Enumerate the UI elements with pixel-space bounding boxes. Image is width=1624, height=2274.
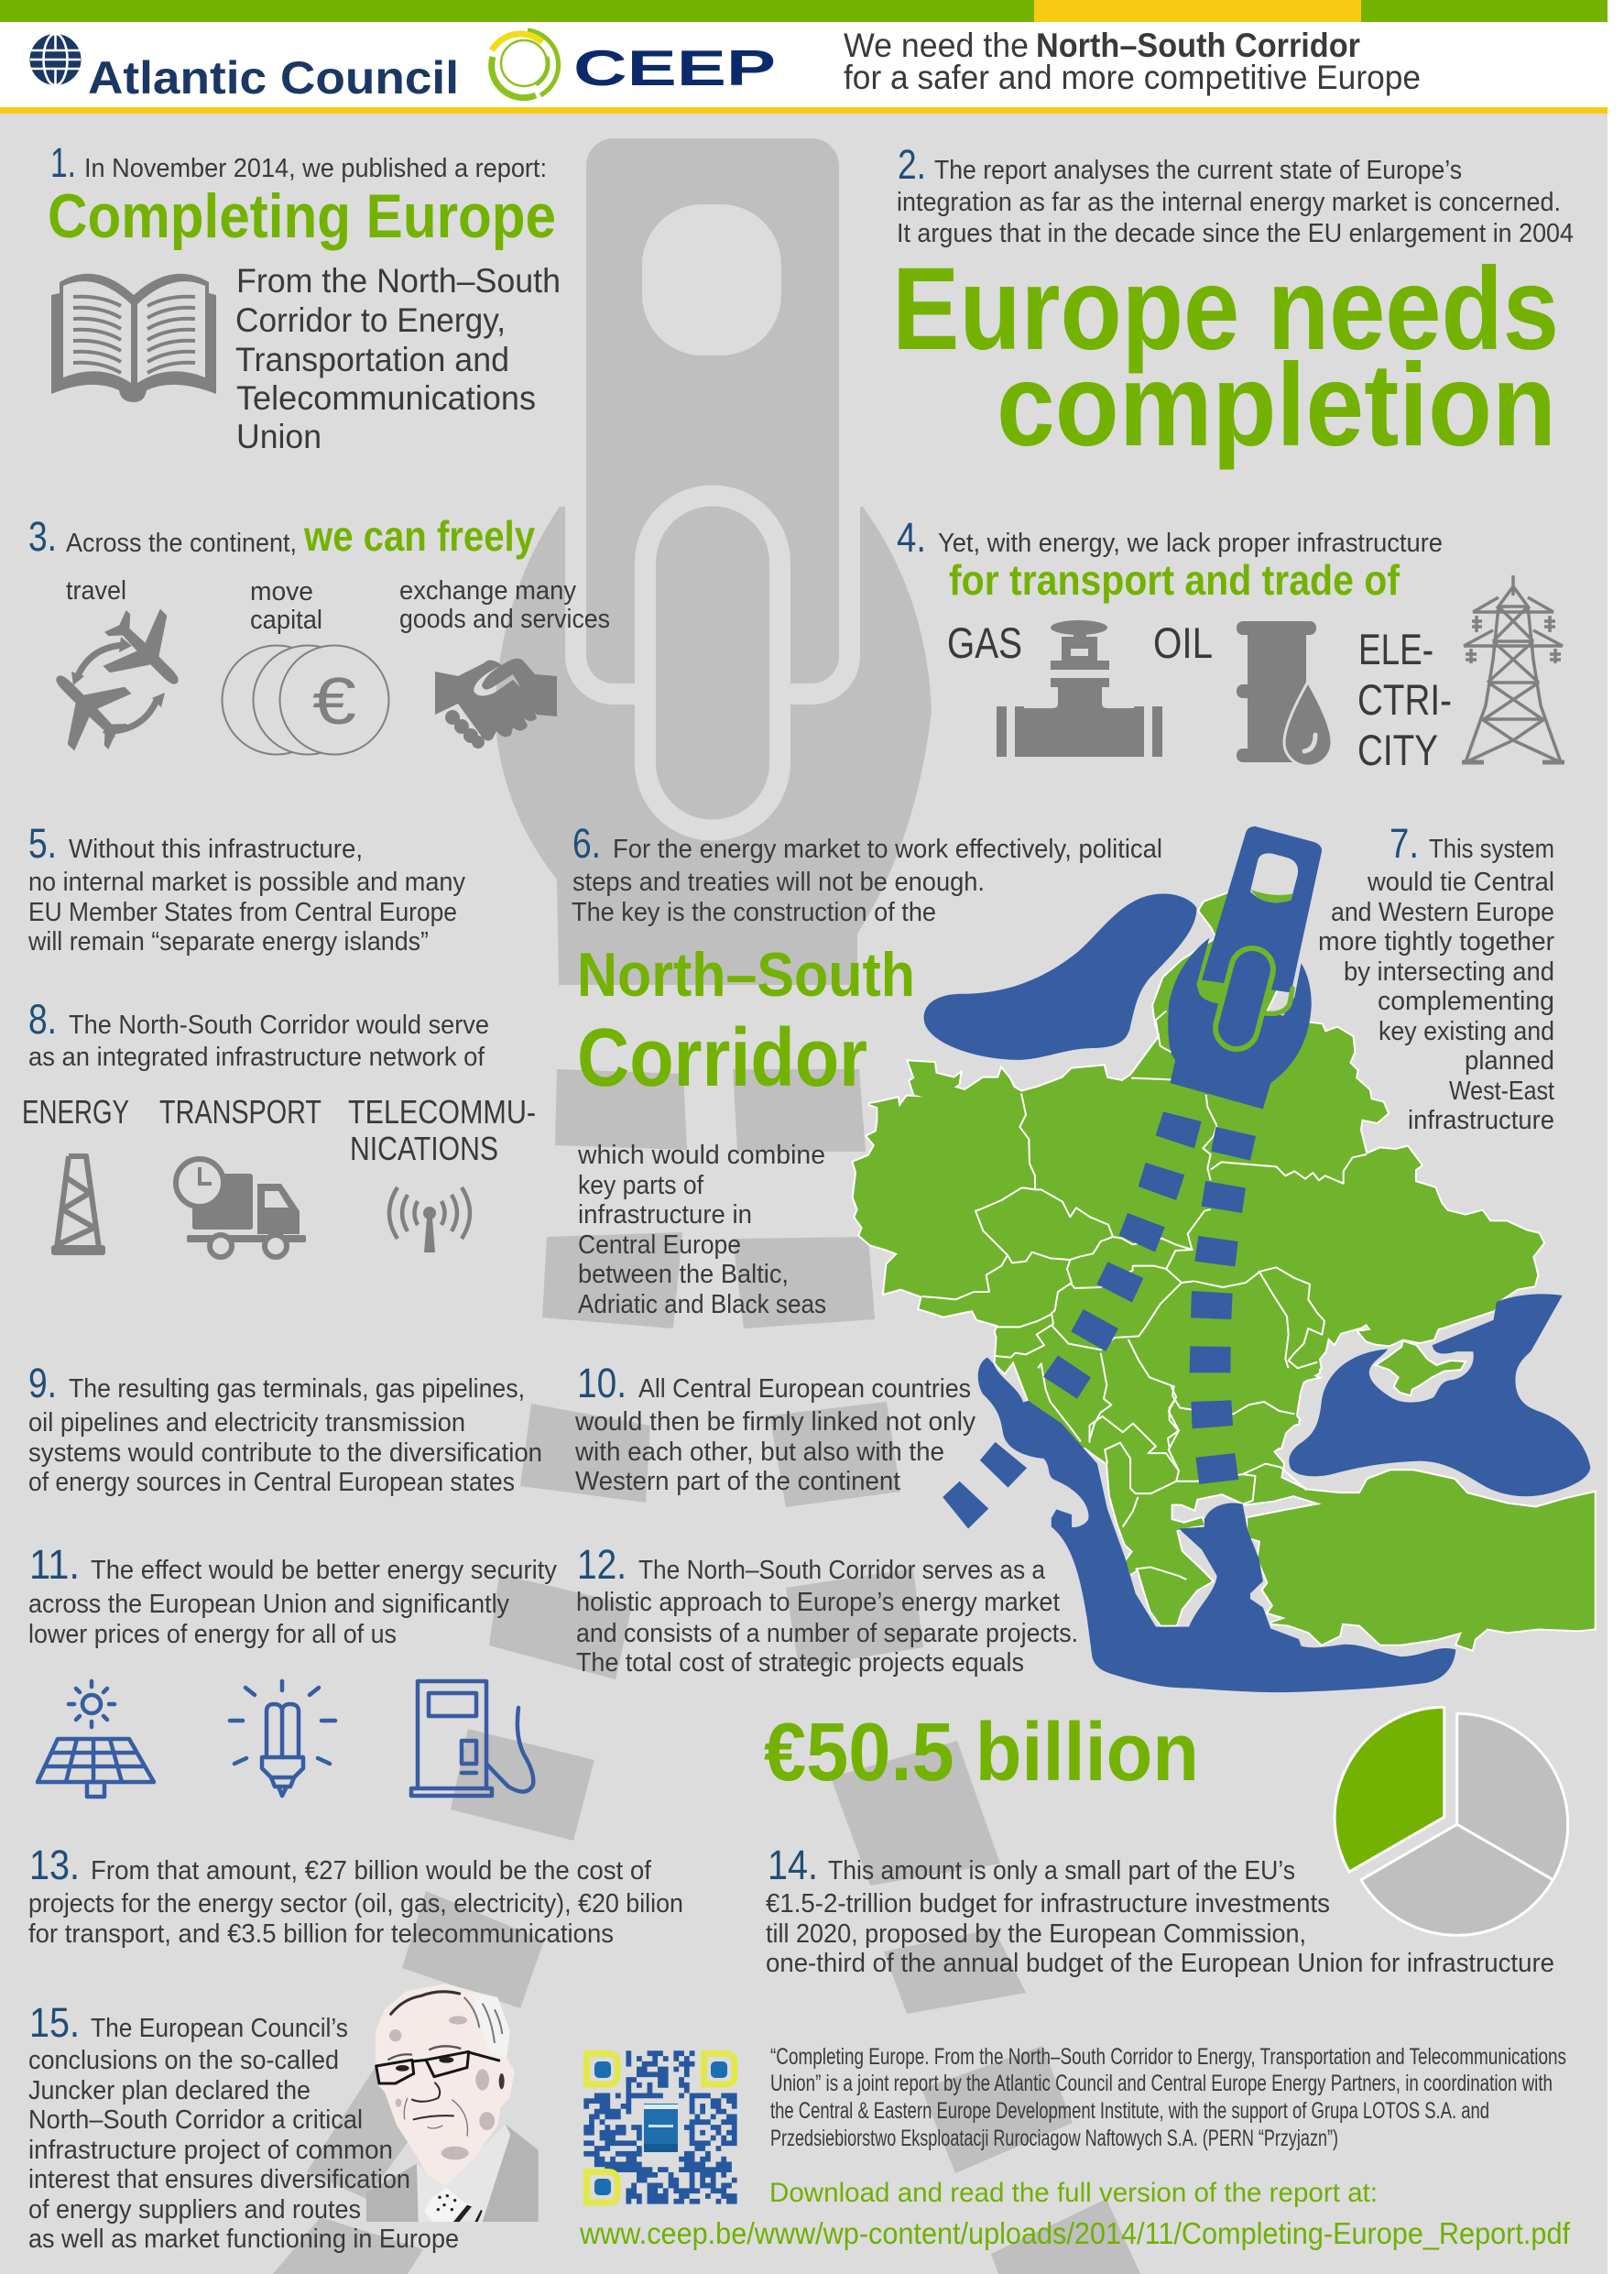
intro: Across the continent, (66, 529, 297, 558)
label: transport: TRANSPORT (159, 1093, 322, 1131)
body text: conclusions on the so-called (28, 2046, 339, 2075)
finder: bottom left (586, 2171, 617, 2203)
body text: EU Member States from Central Europe (28, 898, 457, 927)
body text (897, 156, 1574, 248)
download call to action: www.ceep.be/www/wp-content/uploads/2014/11/Completing-Europe_Report.pdf (579, 2216, 1571, 2250)
map: Central Europe with zipper corridor (854, 826, 1595, 1692)
header slogan: North–South Corridor (1036, 27, 1360, 64)
label: telecommunications (348, 1093, 536, 1167)
icon: open book (51, 274, 216, 402)
description: between the Baltic, (578, 1260, 789, 1289)
body text: West-East (1449, 1077, 1554, 1106)
label: gas: GAS (947, 618, 1022, 667)
panel 4: lack of infrastructure (897, 514, 1564, 774)
body text: projects for the energy sector (oil, gas, electricity), €20 bilion (28, 1889, 683, 1919)
body text: will remain “separate energy islands” (27, 927, 429, 957)
label: electricity: CITY (1357, 726, 1438, 774)
report cover thumbnail (643, 2103, 679, 2153)
label: telecommunications: TELECOMMU- (348, 1093, 536, 1131)
number 15: 15. (29, 1999, 80, 2046)
body text: The effect would be better energy security (91, 1556, 557, 1585)
country borders (east) (1156, 1011, 1466, 1395)
headline: completion (997, 340, 1556, 471)
body text: with each other, but also with the (574, 1438, 944, 1467)
number 11: 11. (29, 1541, 80, 1588)
panel 8: integrated network (22, 996, 536, 1257)
number 8: 8. (28, 996, 57, 1043)
label: telecommunications: NICATIONS (350, 1130, 498, 1167)
body text (28, 1556, 557, 1649)
body text: The North-South Corridor would serve (69, 1011, 489, 1040)
body text: as well as market functioning in Europe (28, 2225, 459, 2254)
label: travel: travel (66, 576, 126, 606)
heading: for transport and trade of (949, 556, 1401, 604)
body text: For the energy market to work effectively, political (613, 835, 1162, 864)
Black Sea (1289, 1294, 1590, 1496)
icon: swirl (492, 30, 559, 98)
body text (574, 1374, 975, 1496)
heading (577, 940, 915, 1104)
body text: The total cost of strategic projects equals (576, 1648, 1024, 1678)
icon: globe (29, 34, 81, 85)
country borders (Balkans) (1090, 1386, 1306, 1580)
heading: Corridor (577, 1012, 867, 1104)
description: Adriatic and Black seas (578, 1290, 826, 1319)
icon: two planes with arrows (28, 593, 206, 767)
body text: The European Council’s (91, 2014, 348, 2043)
body text (28, 1011, 489, 1072)
body text (28, 1374, 542, 1497)
number 12: 12. (577, 1541, 627, 1588)
label: move capital: capital (250, 606, 322, 635)
body text: as an integrated infrastructure network of (28, 1043, 485, 1072)
panel 12: holistic approach (576, 1541, 1199, 1798)
description: key parts of (578, 1171, 704, 1200)
body text: and consists of a number of separate projects. (576, 1619, 1078, 1648)
icon: light bulb (230, 1681, 335, 1796)
body text: interest that ensures diversification (28, 2165, 410, 2194)
body text: Western part of the continent (575, 1467, 900, 1496)
body text: would tie Central (1367, 868, 1554, 897)
download call to action: Download and read the full version of the report at: (769, 2178, 1378, 2208)
subtitle: Union (236, 418, 322, 455)
body text: complementing (1378, 987, 1554, 1016)
nose and mouth (412, 2083, 453, 2119)
panel 13: cost breakdown (28, 1842, 683, 1949)
label: exchange: exchange many (399, 576, 576, 606)
number 7: 7. (1390, 820, 1419, 867)
panel 6: North-South Corridor (572, 820, 1162, 1319)
icon: electricity pylon (1462, 575, 1564, 762)
intro line: In November 2014, we published a report: (84, 154, 547, 183)
background: giant zipper watermark (273, 138, 1140, 2274)
icon: fuel pump (411, 1681, 533, 1796)
body text: From that amount, €27 billion would be the cost of (91, 1856, 652, 1886)
headline (892, 244, 1559, 471)
body text: of energy sources in Central European states (28, 1468, 515, 1497)
body text: planned (1465, 1046, 1554, 1076)
number 5: 5. (28, 820, 57, 867)
heading: North–South (577, 940, 915, 1010)
body text: till 2020, proposed by the European Commission, (766, 1919, 1306, 1949)
header slogan: for a safer and more competitive Europe (844, 59, 1421, 96)
zipper teeth (943, 1111, 1256, 1528)
number 3: 3. (28, 513, 57, 560)
body text (28, 2014, 459, 2254)
icon: antenna (389, 1187, 470, 1252)
hair (472, 1995, 510, 2057)
panel 9: diversification (28, 1360, 542, 1497)
body text: and Western Europe (1331, 898, 1554, 927)
label: move capital (250, 577, 322, 635)
wordmark: CEEP (573, 39, 776, 96)
body text: for transport, and €3.5 billion for telecommunications (28, 1919, 614, 1949)
zipper slider (1168, 826, 1322, 1110)
subtitle (235, 262, 561, 455)
number 13: 13. (29, 1842, 80, 1888)
zipper clip (1199, 969, 1292, 1028)
body text: oil pipelines and electricity transmission (28, 1408, 465, 1438)
subtitle: Corridor to Energy, (235, 301, 506, 339)
body text: across the European Union and significantly (28, 1590, 509, 1619)
QR modules (583, 2053, 737, 2202)
body text (27, 835, 465, 957)
Baltic Sea (924, 893, 1196, 1060)
icon: handshake (435, 659, 557, 749)
body text: infrastructure project of common (28, 2136, 393, 2165)
number 14: 14. (768, 1842, 818, 1888)
finder: top right (703, 2054, 735, 2084)
panel 11: energy security (28, 1541, 557, 1797)
body text: key existing and (1379, 1017, 1554, 1046)
download call to action (579, 2178, 1571, 2250)
header slogan: We need the (844, 27, 1029, 64)
heading: Completing Europe (48, 181, 556, 251)
grey slice right (1457, 1713, 1568, 1880)
face (376, 1984, 515, 2185)
body text: no internal market is possible and many (28, 868, 465, 897)
panel 2: Europe needs completion (892, 141, 1574, 471)
number 1: 1. (50, 139, 76, 186)
body text (572, 835, 1162, 927)
label: electricity: ELE- (1358, 625, 1433, 673)
number 10: 10. (577, 1360, 627, 1406)
logo: Atlantic Council (29, 34, 459, 104)
number 2: 2. (898, 141, 926, 188)
body text: steps and treaties will not be enough. (572, 868, 985, 897)
body text (28, 1856, 683, 1949)
description: Central Europe (578, 1230, 741, 1260)
label: oil: OIL (1153, 618, 1213, 667)
icon: gas valve (997, 620, 1162, 757)
shirt (417, 2124, 510, 2222)
icon: three coins with euro (222, 645, 388, 755)
icon: three coins with euro: € (312, 665, 356, 738)
panel 3: freedoms (28, 512, 610, 767)
panel 14: EU budget (766, 1842, 1554, 1978)
glasses (376, 2051, 500, 2083)
body text: It argues that in the decade since the EU enlargement in 2004 (897, 219, 1574, 248)
body text: integration as far as the internal energy market is concerned. (897, 188, 1561, 217)
body text: lower prices of energy for all of us (28, 1620, 397, 1649)
pie chart: one-third share (1335, 1707, 1568, 1935)
body text: The North–South Corridor serves as a (638, 1556, 1046, 1585)
credits text (770, 2044, 1566, 2151)
Adriatic and Aegean seas (978, 1358, 1455, 1692)
body text: systems would contribute to the diversification (28, 1438, 542, 1468)
panel 15: Juncker plan (28, 1999, 459, 2254)
subtitle: Telecommunications (236, 379, 536, 417)
header: colour bars (0, 0, 1608, 114)
label: electricity (1357, 625, 1452, 774)
body text: €1.5-2-trillion budget for infrastructure investments (766, 1889, 1330, 1919)
number 9: 9. (28, 1360, 57, 1406)
portrait: Jean-Claude Juncker (366, 1984, 539, 2222)
icon: solar panel (38, 1681, 154, 1797)
body text: more tightly together (1318, 927, 1554, 957)
eyes and brows (396, 2057, 505, 2089)
body text: Without this infrastructure, (69, 835, 363, 864)
total cost figure: €50.5 billion (764, 1707, 1199, 1798)
description: infrastructure in (578, 1200, 752, 1230)
label: electricity: CTRI- (1357, 675, 1452, 724)
number 4: 4. (897, 514, 926, 561)
body text: North–South Corridor a critical (28, 2105, 363, 2135)
body text: of energy suppliers and routes (28, 2195, 361, 2225)
body text: would then be firmly linked not only (574, 1407, 975, 1437)
label: move capital: move (250, 577, 313, 607)
body text: infrastructure (1408, 1106, 1554, 1135)
body text: The report analyses the current state of Europe’s (934, 156, 1462, 185)
credits text: Przedsiebiorstwo Eksploatacji Rurociagow Naftowych S.A. (PERN “Przyjazn”) (770, 2126, 1338, 2151)
icon: oil barrel with drop (1237, 621, 1332, 766)
body text: This system (1429, 835, 1554, 864)
panel 7: tying Europe together (1318, 820, 1554, 1135)
panel 10: linked countries (574, 1360, 975, 1496)
body text: All Central European countries (638, 1374, 971, 1404)
logo: CEEP (492, 30, 776, 98)
suit (366, 2124, 539, 2222)
subtitle: Transportation and (235, 341, 509, 378)
grey slice bottom (1361, 1824, 1553, 1935)
body text (1318, 835, 1554, 1135)
label: exchange: goods and services (399, 605, 610, 634)
finder: top left (586, 2054, 617, 2084)
label: energy: ENERGY (22, 1093, 129, 1131)
body text: one-third of the annual budget of the European Union for infrastructure (766, 1949, 1554, 1978)
body text: This amount is only a small part of the EU’s (828, 1856, 1295, 1886)
intro: Yet, with energy, we lack proper infrastructure (938, 529, 1443, 558)
body text: by intersecting and (1344, 957, 1554, 987)
header slogan (844, 27, 1421, 96)
country borders (north) (922, 1078, 1294, 1448)
description (577, 1141, 826, 1319)
land masses (854, 891, 1595, 1649)
body text: Juncker plan declared the (28, 2076, 311, 2105)
description: which would combine (577, 1141, 825, 1170)
body text: The key is the construction of the (572, 898, 936, 927)
skin texture (389, 2016, 495, 2159)
body text: The resulting gas terminals, gas pipelines, (69, 1374, 525, 1404)
number 6: 6. (572, 820, 601, 867)
label: exchange (399, 576, 610, 634)
icon: truck with clock (176, 1159, 306, 1257)
tie (424, 2188, 483, 2222)
body text (576, 1556, 1078, 1678)
wordmark: Atlantic Council (88, 52, 459, 104)
highlighted words: we can freely (303, 512, 535, 560)
panel 1: report title (48, 139, 561, 455)
subtitle: From the North–South (236, 262, 561, 300)
green slice (1335, 1707, 1444, 1872)
panel 5: energy islands (27, 820, 465, 957)
icon: oil derrick (51, 1156, 105, 1255)
QR code (583, 2053, 737, 2203)
body text (766, 1856, 1554, 1978)
body text: holistic approach to Europe’s energy market (576, 1588, 1060, 1617)
